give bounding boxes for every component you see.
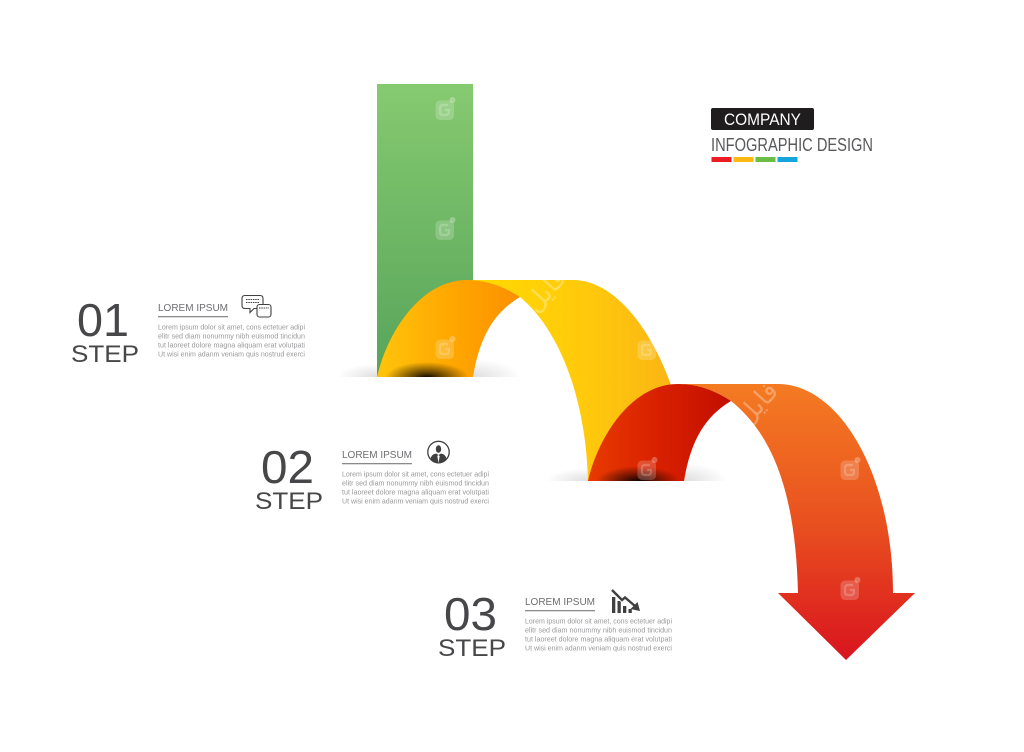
infographic canvas	[72, 84, 915, 660]
icon: chat bubbles	[242, 296, 271, 317]
watermark text: فایل	[731, 376, 785, 432]
colour key bars	[712, 157, 798, 162]
step 02 label: STEP	[255, 488, 323, 515]
step 01 body text	[158, 322, 305, 358]
red arch	[588, 384, 731, 481]
icon: business person	[428, 441, 449, 464]
step 03 number: 03	[444, 588, 497, 640]
step 03	[438, 588, 672, 662]
orange-red arrow	[676, 384, 915, 660]
step 02 number: 02	[261, 441, 314, 493]
step 01 body text: Lorem ipsum dolor sit amet, cons ectetuer adipi	[158, 322, 305, 332]
step 03 body text: Ut wisi enim adanm veniam quis nostrud exerci	[525, 644, 672, 652]
floor shadows	[337, 359, 728, 499]
step 02	[255, 441, 489, 515]
step 02 body text: tut laoreet dolore magna aliquam erat volutpati	[342, 488, 489, 496]
step 03 body text: Lorem ipsum dolor sit amet, cons ectetuer adipi	[525, 616, 672, 626]
step 02 body text	[342, 470, 489, 506]
orange arch	[377, 280, 520, 377]
yellow ribbon	[465, 280, 680, 481]
step 03 label: STEP	[438, 635, 506, 662]
icon: falling chart	[612, 590, 640, 613]
green bar	[377, 84, 473, 377]
step 01 label: STEP	[71, 341, 139, 368]
step 01 number: 01	[77, 294, 129, 346]
step 01 heading: LOREM IPSUM	[158, 303, 228, 314]
step 01 body text: Ut wisi enim adanm veniam quis nostrud exerci	[158, 350, 305, 358]
step 01 body text: tut laoreet dolore magna aliquam erat volutpati	[158, 340, 305, 350]
step 03 body text: tut laoreet dolore magna aliquam erat volutpati	[525, 634, 672, 644]
watermark text	[519, 263, 785, 432]
step 01	[71, 294, 305, 368]
company badge: COMPANY	[724, 110, 801, 129]
subtitle: INFOGRAPHIC DESIGN	[711, 135, 873, 155]
step 03 body text: elitr sed diam nonummy nibh euismod tincidun	[525, 626, 672, 634]
step 02 body text: Lorem ipsum dolor sit amet, cons ectetuer adipi	[342, 470, 489, 478]
step 03 body text	[525, 616, 672, 652]
watermark marks	[436, 97, 860, 600]
step 03 heading: LOREM IPSUM	[525, 597, 595, 608]
step 02 heading: LOREM IPSUM	[342, 450, 412, 461]
watermark text: فایل	[519, 263, 573, 319]
step 02 body text: Ut wisi enim adanm veniam quis nostrud exerci	[342, 496, 489, 506]
step 01 body text: elitr sed diam nonummy nibh euismod tincidun	[158, 332, 305, 340]
step 02 body text: elitr sed diam nonummy nibh euismod tincidun	[342, 478, 489, 488]
